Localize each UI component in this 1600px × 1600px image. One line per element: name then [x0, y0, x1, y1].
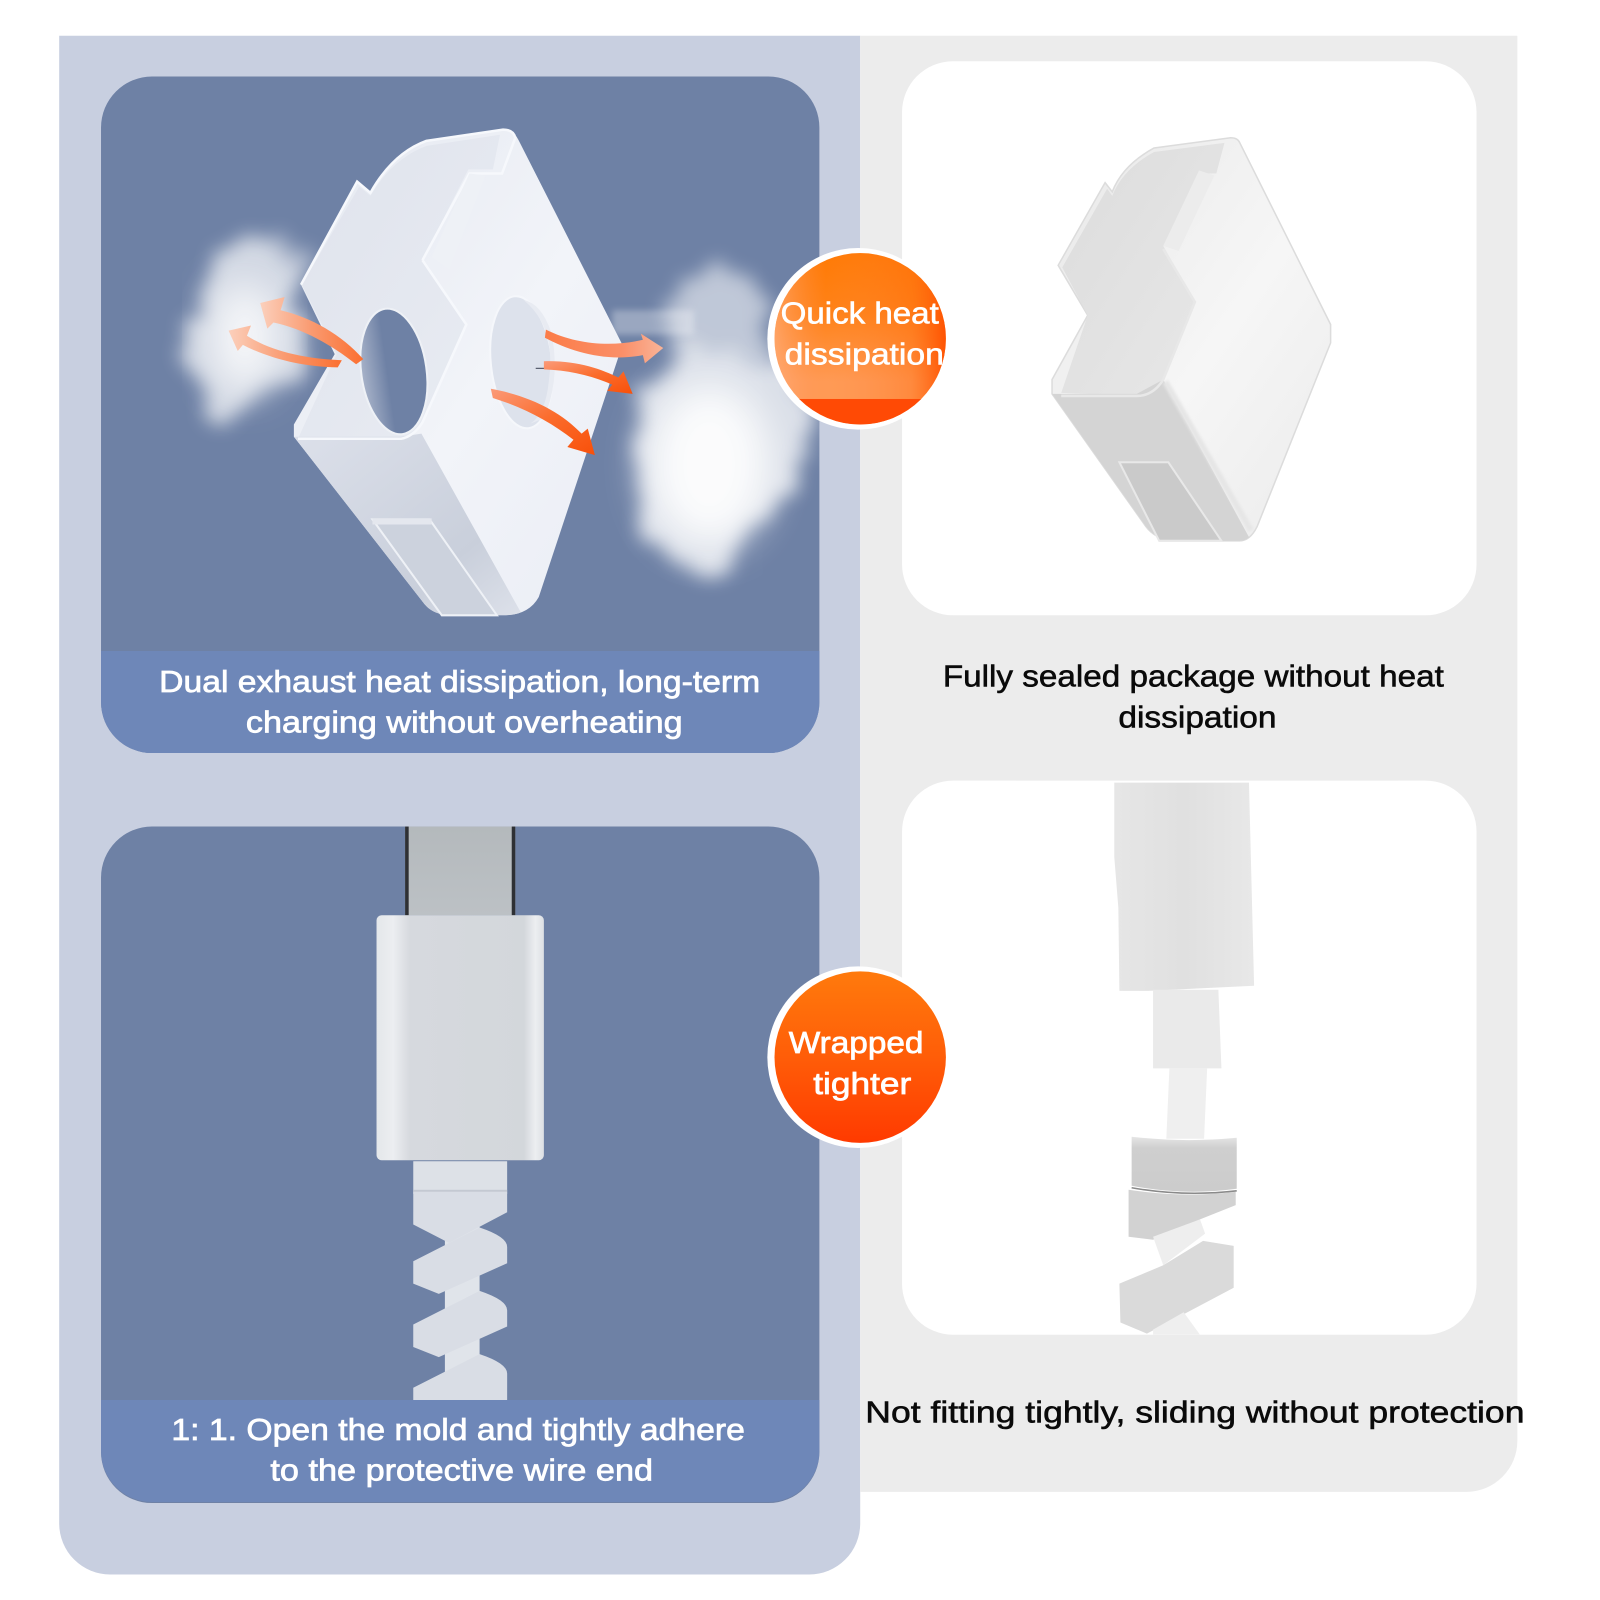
caption bar: heat dissipation — [101, 651, 819, 753]
icon: USB-C connector and spiral — [377, 827, 544, 1400]
connector metal tip — [405, 827, 515, 915]
text: spiral fit caption — [171, 1413, 745, 1488]
icon: loose connector and wrap — [1114, 783, 1254, 1335]
icon: sealed shell — [1052, 138, 1331, 541]
text: heat dissipation caption — [159, 665, 760, 740]
text: heat dissipation caption: Dual exhaust heat dissipation, long-term — [159, 665, 760, 699]
vent hole: right — [484, 293, 559, 431]
text: spiral fit caption: to the protective wire end — [270, 1454, 653, 1488]
badge: wrapped tighter — [767, 966, 949, 1148]
smoke cloud: left — [181, 238, 307, 421]
shell slot — [1163, 170, 1214, 251]
shell lower side face — [294, 434, 522, 615]
panel: right comparison background — [860, 36, 1517, 1492]
text: heat dissipation caption: charging without overheating — [246, 706, 683, 740]
first ring — [1132, 1137, 1237, 1192]
loose connector body — [1114, 783, 1254, 991]
text: sealed package caption — [943, 660, 1444, 735]
panel: tight spiral fit — [101, 827, 819, 1503]
shell front face — [298, 135, 500, 439]
badge: quick heat dissipation: Quick heat — [781, 296, 939, 330]
smoke cloud: right — [612, 270, 811, 573]
loose connector neck — [1153, 990, 1221, 1068]
panel: left comparison background — [59, 36, 860, 1574]
caption bar: spiral fit — [101, 1400, 819, 1502]
connector body — [377, 915, 544, 1160]
second ring — [1129, 1190, 1236, 1240]
shell slot wall — [432, 173, 486, 269]
arrow: upper right exhaust — [545, 330, 663, 363]
panel: loose fitting — [902, 781, 1477, 1335]
badge: quick heat dissipation — [767, 248, 949, 430]
icon: vented protector shell — [294, 130, 622, 615]
badge: quick heat dissipation: dissipation — [785, 337, 944, 371]
exposed wire — [1166, 1068, 1207, 1139]
shell front face — [1061, 143, 1224, 396]
shell rim highlights — [298, 130, 515, 439]
spiral wrap — [413, 1161, 507, 1400]
arrow: lower left exhaust — [229, 326, 342, 367]
badge: wrapped tighter: Wrapped — [789, 1026, 923, 1060]
text: spiral fit caption: 1: 1. Open the mold and tightly adhere — [171, 1413, 745, 1447]
vent hole: left — [353, 304, 435, 439]
shell recess — [1119, 462, 1221, 541]
wire segment — [1153, 1219, 1205, 1265]
lower wire segment — [1153, 1312, 1200, 1335]
shell recess — [372, 519, 497, 615]
panel: dual exhaust heat dissipation — [101, 77, 819, 753]
arrow: middle right exhaust — [544, 361, 633, 394]
third wrap — [1119, 1241, 1234, 1334]
panel: fully sealed package — [902, 61, 1477, 615]
text: sealed package caption: Fully sealed package without heat — [943, 660, 1444, 694]
arrow: lower right exhaust — [491, 389, 595, 455]
arrow: upper left exhaust — [260, 297, 363, 364]
shell side face — [1052, 380, 1251, 541]
text: sealed package caption: dissipation — [1118, 701, 1277, 735]
badge: wrapped tighter: tighter — [813, 1067, 911, 1101]
text: loose fitting caption: Not fitting tightly, sliding without protection — [865, 1395, 1524, 1429]
ring gap shadow — [1132, 1188, 1237, 1193]
